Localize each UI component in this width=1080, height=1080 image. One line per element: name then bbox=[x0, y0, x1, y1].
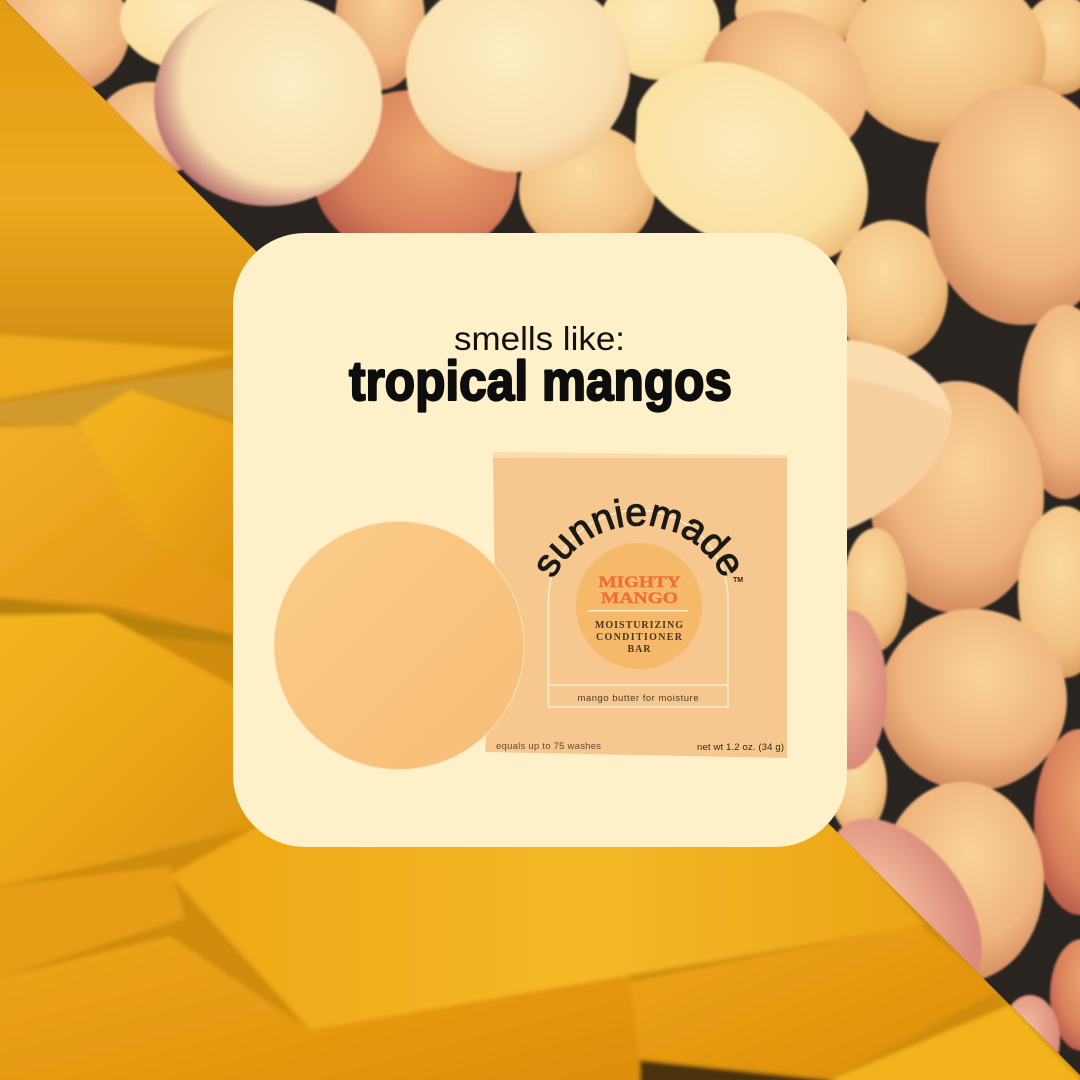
text: mighty mango bbox=[598, 574, 681, 607]
text: moisturizing conditioner bar: BAR bbox=[628, 644, 651, 655]
text: mighty mango: MANGO bbox=[601, 590, 678, 607]
product: conditioner box bbox=[485, 452, 787, 758]
text: mango butter for moisture: mango butter for moisture bbox=[578, 693, 698, 704]
text: moisturizing conditioner bar: MOISTURIZING bbox=[595, 620, 683, 631]
product: round conditioner bar bbox=[274, 522, 524, 770]
text: net weight: net wt 1.2 oz. (34 g) bbox=[697, 742, 784, 753]
text: smells like: smells like: bbox=[454, 320, 625, 357]
brand: sunniemade curved wordmark: TM bbox=[733, 577, 743, 584]
text: moisturizing conditioner bar bbox=[595, 620, 683, 655]
icon: arch outline bbox=[548, 510, 728, 707]
brand: sunniemade curved wordmark: sunniemade bbox=[538, 498, 738, 577]
panel: cream product card bbox=[233, 233, 847, 847]
text: equals up to 75 washes: equals up to 75 washes bbox=[496, 741, 601, 752]
text: moisturizing conditioner bar: CONDITIONER bbox=[596, 632, 683, 643]
icon: label circle bbox=[576, 543, 702, 669]
text: mighty mango: MIGHTY bbox=[598, 574, 681, 591]
heading: tropical mangos: tropical mangos bbox=[349, 349, 732, 412]
